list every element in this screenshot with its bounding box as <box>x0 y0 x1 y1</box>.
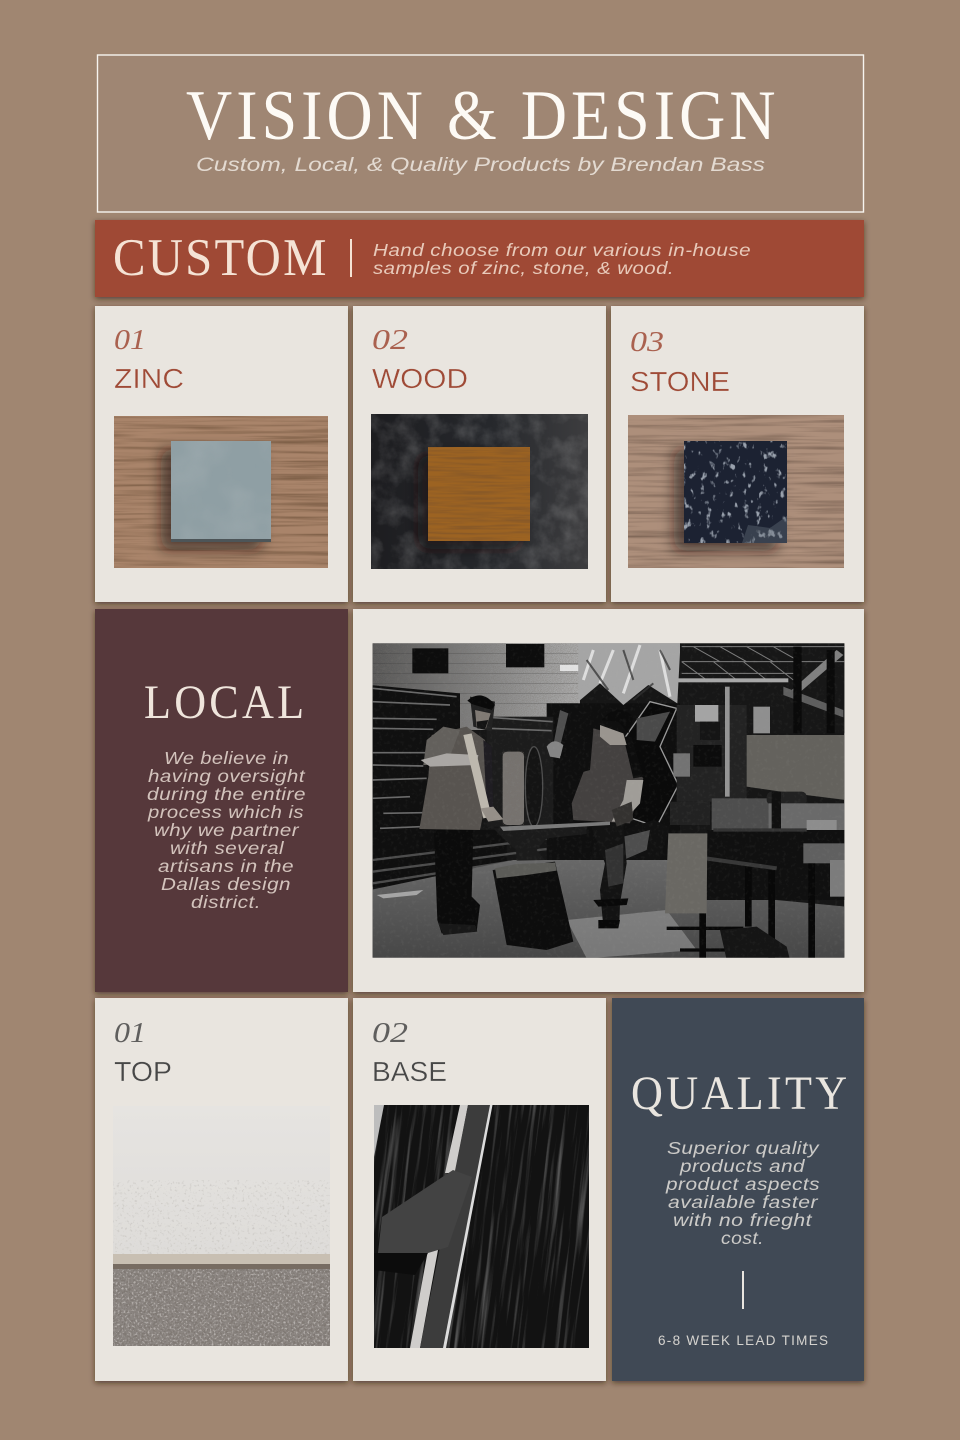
image: stone sample on wood <box>628 415 844 568</box>
dark diamonds <box>623 702 678 827</box>
shelves <box>370 685 460 830</box>
anvil <box>493 825 587 861</box>
wood label: WOOD <box>372 363 468 394</box>
local body text: Dallas design <box>161 874 291 894</box>
stone label: STONE <box>630 366 730 397</box>
image: wood sample on dark metal <box>371 414 588 569</box>
left smith <box>419 695 503 935</box>
panel: zinc card <box>95 306 348 602</box>
panel: custom banner <box>95 220 864 297</box>
local body text: during the entire <box>147 784 306 804</box>
lead times note: 6-8 WEEK LEAD TIMES <box>658 1333 828 1348</box>
custom description: Hand choose from our various in-house <box>373 240 751 260</box>
brick wall <box>370 640 580 730</box>
panel: stone card <box>611 306 864 602</box>
local heading: LOCAL <box>144 675 304 728</box>
quality body text: available faster <box>668 1192 819 1212</box>
stone number: 03 <box>630 326 664 358</box>
upper right trusses <box>680 640 847 733</box>
panel: base card <box>350 996 610 1387</box>
gas cylinder <box>503 752 524 825</box>
quality heading: QUALITY <box>631 1066 847 1119</box>
local body text: having oversight <box>148 766 306 786</box>
right machinery <box>670 802 710 825</box>
quality body text: products and <box>679 1156 806 1176</box>
table frame <box>703 860 812 960</box>
subtitle: Custom, Local, & Quality Products by Brendan Bass <box>196 154 765 176</box>
panel: quality <box>612 998 864 1381</box>
image: stone top edge <box>113 1106 330 1346</box>
base number: 02 <box>372 1017 408 1049</box>
panel: local <box>95 609 348 992</box>
panel: workshop photo card <box>353 609 864 992</box>
right smith <box>547 710 643 928</box>
top number: 01 <box>114 1017 146 1049</box>
big stump <box>493 862 573 950</box>
panel: top card <box>95 998 348 1381</box>
quality body text <box>665 1138 820 1248</box>
local body text: We believe in <box>164 748 289 768</box>
scrap behind second smith <box>644 822 660 828</box>
quality body text: cost. <box>721 1228 764 1248</box>
wood number: 02 <box>372 324 408 356</box>
local body text: process which is <box>147 802 304 822</box>
panel: wood card <box>353 306 606 602</box>
custom description <box>373 240 751 278</box>
base label: BASE <box>372 1056 447 1087</box>
local body text: with several <box>170 838 285 858</box>
header: title frame <box>98 55 864 212</box>
middle dark background <box>546 703 590 850</box>
floor <box>370 860 847 960</box>
image: two blacksmiths at an anvil <box>370 640 847 960</box>
zinc number: 01 <box>114 324 146 356</box>
local body text: artisans in the <box>158 856 294 876</box>
background machinery <box>677 705 747 802</box>
local body text <box>147 748 306 912</box>
tank <box>747 735 847 800</box>
photo grit overlay <box>373 643 844 958</box>
top label: TOP <box>114 1056 172 1087</box>
custom description: samples of zinc, stone, & wood. <box>373 258 674 278</box>
zinc label: ZINC <box>114 363 184 394</box>
custom heading: CUSTOM <box>113 229 326 287</box>
image: zinc sample on wood <box>114 416 328 568</box>
plastic sheet <box>578 640 681 705</box>
local body text: why we partner <box>154 820 300 840</box>
title: VISION & DESIGN <box>186 76 776 155</box>
quality body text: with no frieght <box>673 1210 813 1230</box>
local body text: district. <box>191 892 261 912</box>
quality body text: Superior quality <box>667 1138 820 1158</box>
image: dark steel base <box>374 1105 589 1348</box>
quality body text: product aspects <box>665 1174 820 1194</box>
small stump <box>665 833 707 913</box>
